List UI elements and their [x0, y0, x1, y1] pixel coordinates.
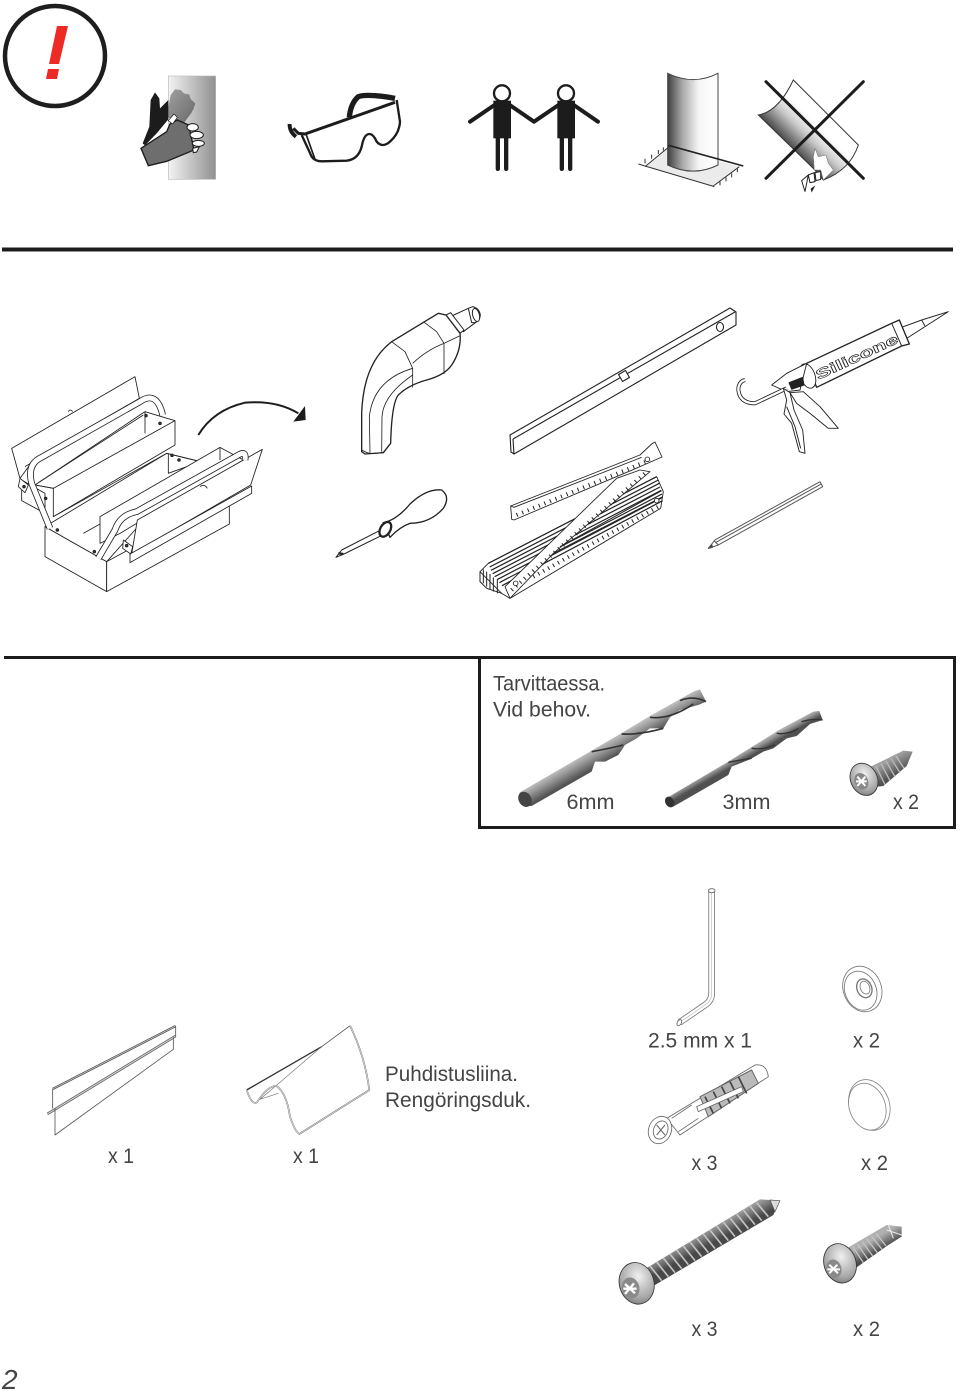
tool: silicone caulking gun: [738, 312, 948, 453]
label: hex key size: 2.5 mm x 1: [648, 1030, 752, 1052]
part: hex key: [676, 889, 715, 1027]
icon: safety goggles: [290, 95, 400, 161]
part: short screw: [819, 1225, 902, 1287]
icon: 3mm drill bit: [663, 711, 823, 809]
icon: measured wall cylinder: [638, 73, 743, 187]
label: x 2 short screws: x 2: [853, 1318, 880, 1341]
label: x 2 screws: x 2: [893, 791, 919, 814]
icon: gloves on panel: [141, 76, 216, 179]
icon: warning circle: [5, 6, 105, 106]
illustration: open toolbox: [12, 377, 262, 592]
icon: 6mm drill bit: [516, 689, 706, 809]
label: 3mm: 3mm: [722, 791, 770, 814]
label: x 1 cloth: x 1: [293, 1145, 319, 1168]
part: wall strip: [47, 1026, 176, 1135]
label: 6mm: 6mm: [566, 791, 614, 814]
text: cleaning cloth note: Puhdistusliina.: [385, 1063, 518, 1086]
tool: pencil: [708, 482, 823, 548]
text: cleaning cloth note: Rengöringsduk.: [385, 1089, 531, 1112]
part: wall plug: [644, 1065, 768, 1147]
text: cleaning cloth note: [385, 1063, 531, 1112]
label: x 2 washers: x 2: [853, 1030, 880, 1052]
tool: screwdriver: [336, 490, 447, 557]
text: optional note: [493, 672, 605, 722]
label: x 3 plugs: x 3: [692, 1152, 718, 1175]
tool: spirit level: [510, 308, 736, 454]
label: x 2 caps: x 2: [861, 1152, 888, 1175]
arrow: toolbox to tools: [198, 402, 306, 435]
tool: silicone caulking gun: Silicone: [813, 330, 901, 383]
icon: small screw: [845, 751, 913, 800]
tool: power drill: [362, 307, 481, 454]
part: washer: [836, 960, 889, 1018]
text: optional note: Vid behov.: [493, 698, 591, 722]
part: cover cap: [842, 1074, 897, 1136]
label: x 3 long screws: x 3: [692, 1318, 718, 1341]
part: cleaning cloth: [247, 1026, 369, 1134]
label: x 1 strip: x 1: [108, 1145, 134, 1168]
part: long screw: [614, 1199, 780, 1308]
text: optional note: Tarvittaessa.: [493, 672, 605, 696]
tool: folding ruler: [480, 442, 663, 598]
icon: two people holding hands: [470, 85, 598, 171]
panel: optional items box: [4, 658, 954, 828]
icon: no fire crossed out: [758, 80, 863, 193]
